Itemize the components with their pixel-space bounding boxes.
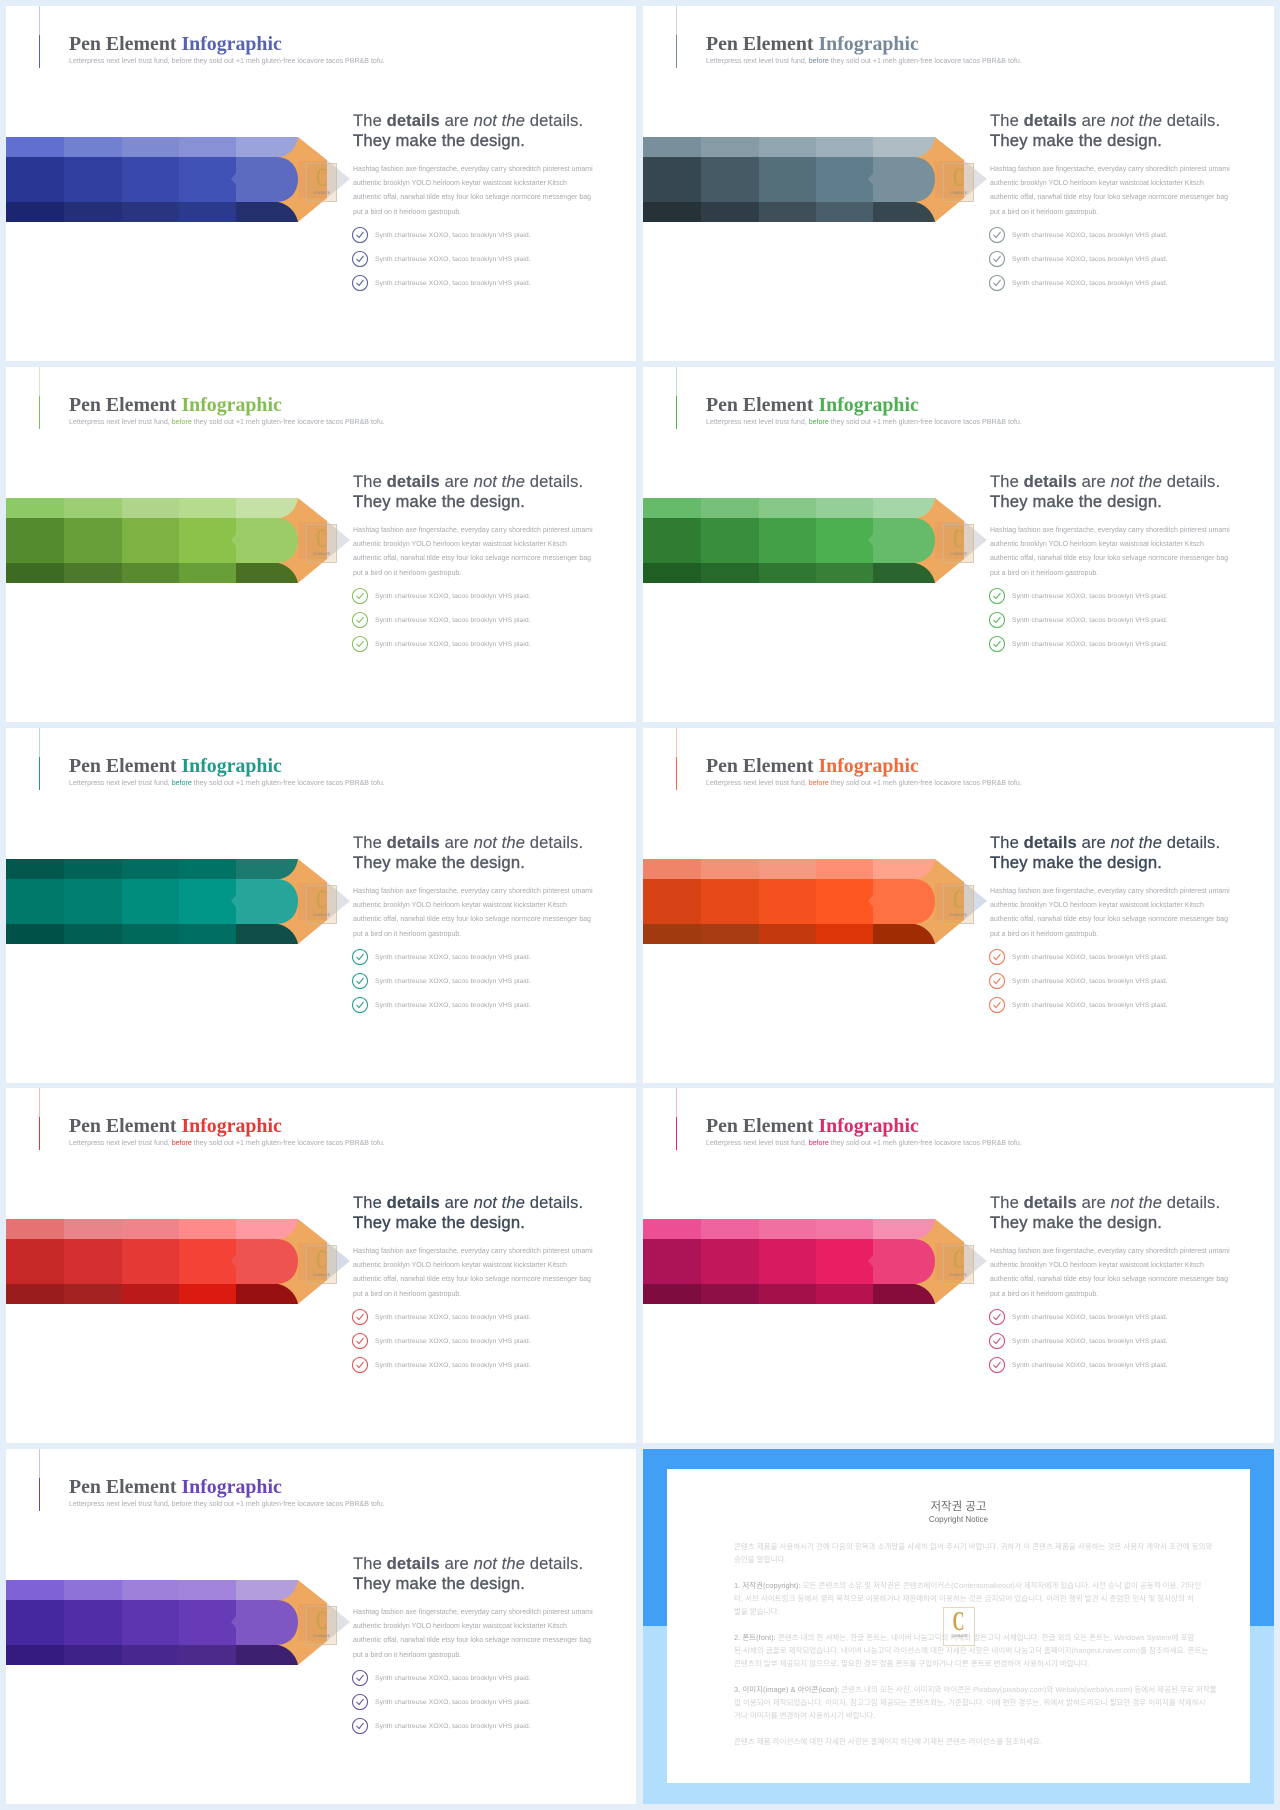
watermark: [944, 163, 974, 202]
heading: The details are not the details.: [990, 1193, 1220, 1212]
body text: authentic brooklyn YOLO heirloom keytar waistcoat kickstarter Kitsch: [353, 1262, 567, 1269]
checklist: Synth chartreuse XOXO, tacos brooklyn VHS plaid.: [375, 1362, 531, 1369]
notice body: 콘텐츠 제품 라이선스에 대한 자세한 사항은 홈페이지 하단에 기재된 콘텐츠 라이선스를 참조하세요.: [734, 1737, 1042, 1746]
body text: Hashtag fashion axe fingerstache, everyday carry shoreditch pinterest umami: [353, 1609, 593, 1616]
body text: put a bird on it heirloom gastropub.: [353, 1652, 461, 1659]
notice sheet: [667, 1469, 1250, 1783]
pencil wood tip: [905, 498, 964, 583]
bottom band: [6, 1645, 298, 1665]
bottom band: [6, 1284, 298, 1304]
body text: authentic offal, narwhal tilde etsy four loko selvage normcore messenger bag: [353, 555, 591, 562]
heading: [353, 472, 583, 511]
subtitle: Letterpress next level trust fund, before they sold out +1 meh gluten-free locavore tacos PBR&B tofu.: [69, 1139, 385, 1147]
body text: [353, 1248, 593, 1298]
watermark: CONSULTE: [313, 913, 330, 917]
heading: The details are not the details.: [990, 472, 1220, 491]
pencil point: [327, 521, 350, 559]
icon: blue grey pencil: [643, 137, 987, 222]
checklist: [989, 949, 1168, 1013]
pencil point: [964, 882, 987, 920]
pencil wood tip: [268, 1219, 327, 1304]
bottom band: [6, 563, 298, 583]
checklist: Synth chartreuse XOXO, tacos brooklyn VHS plaid.: [375, 280, 531, 287]
checklist: Synth chartreuse XOXO, tacos brooklyn VHS plaid.: [1012, 1002, 1168, 1009]
title: Pen Element Infographic: [69, 33, 282, 55]
heading: The details are not the details.: [990, 833, 1220, 852]
middle band: [643, 518, 935, 563]
body text: authentic offal, narwhal tilde etsy four loko selvage normcore messenger bag: [353, 1276, 591, 1283]
pencil wood tip: [905, 1219, 964, 1304]
checklist: [352, 949, 531, 1013]
pencil wood tip: [905, 137, 964, 222]
checklist: [352, 1669, 572, 1739]
pencil point: [327, 1603, 350, 1641]
watermark: [306, 524, 336, 562]
watermark: C: [316, 524, 327, 553]
heading: The details are not the details.: [990, 111, 1220, 130]
body text: put a bird on it heirloom gastropub.: [990, 1291, 1098, 1298]
watermark: CONSULTE: [950, 1273, 967, 1277]
heading: The details are not the details.: [353, 472, 583, 491]
bottom band: [643, 1284, 935, 1304]
checklist: Synth chartreuse XOXO, tacos brooklyn VHS plaid.: [1012, 617, 1168, 624]
watermark: C: [316, 885, 327, 914]
checklist: Synth chartreuse XOXO, tacos brooklyn VHS plaid.: [1012, 1338, 1168, 1345]
body text: authentic brooklyn YOLO heirloom keytar waistcoat kickstarter Kitsch: [990, 902, 1204, 909]
body text: [353, 888, 593, 938]
body text: Hashtag fashion axe fingerstache, everyday carry shoreditch pinterest umami: [353, 166, 593, 173]
panel: deep orange pencil infographic: [643, 728, 1274, 1083]
body text: [990, 526, 1230, 577]
panel: teal pencil infographic: [6, 728, 636, 1083]
watermark: C: [953, 1245, 964, 1274]
watermark: [943, 1607, 975, 1646]
checklist: Synth chartreuse XOXO, tacos brooklyn VHS plaid.: [1012, 641, 1168, 648]
checklist: Synth chartreuse XOXO, tacos brooklyn VHS plaid.: [375, 256, 531, 263]
heading: The details are not the details.: [353, 111, 583, 130]
icon: deep orange pencil: [643, 859, 987, 944]
notice body: 벌을 받습니다.: [734, 1607, 780, 1616]
title: Pen Element Infographic: [69, 755, 282, 777]
heading: [353, 111, 583, 150]
checklist: Synth chartreuse XOXO, tacos brooklyn VHS plaid.: [375, 1338, 531, 1345]
heading: [990, 111, 1220, 150]
pencil wood tip: [268, 1580, 327, 1665]
pencil point: [964, 1242, 987, 1280]
heading: They make the design.: [353, 1574, 525, 1593]
body text: [353, 526, 593, 577]
middle band: [643, 1239, 935, 1284]
watermark: C: [953, 885, 964, 914]
body text: authentic offal, narwhal tilde etsy four loko selvage normcore messenger bag: [353, 916, 591, 923]
panel: purple pencil infographic: [6, 1449, 636, 1804]
body text: authentic brooklyn YOLO heirloom keytar waistcoat kickstarter Kitsch: [353, 1623, 567, 1630]
subtitle: Letterpress next level trust fund, before they sold out +1 meh gluten-free locavore tacos PBR&B tofu.: [706, 57, 1022, 65]
body text: put a bird on it heirloom gastropub.: [353, 1291, 461, 1298]
body text: put a bird on it heirloom gastropub.: [990, 931, 1098, 938]
watermark: [944, 885, 974, 924]
checklist: [989, 588, 1168, 652]
heading: [990, 1193, 1220, 1233]
top band: [6, 137, 298, 157]
accent line: [676, 728, 677, 790]
pencil point: [327, 1242, 350, 1280]
body text: Hashtag fashion axe fingerstache, everyday carry shoreditch pinterest umami: [353, 1248, 593, 1255]
watermark: [944, 1245, 974, 1284]
notice body: 거나 이미지를 변경하여 사용하시기 바랍니다.: [734, 1711, 876, 1720]
watermark: C: [316, 163, 327, 192]
checklist: Synth chartreuse XOXO, tacos brooklyn VHS plaid.: [1012, 256, 1168, 263]
heading: [353, 1193, 583, 1232]
checklist: Synth chartreuse XOXO, tacos brooklyn VHS plaid.: [1012, 280, 1168, 287]
top band: [6, 1219, 298, 1239]
body text: [990, 166, 1230, 216]
title: Pen Element Infographic: [69, 1476, 282, 1498]
watermark: CONSULTE: [313, 191, 330, 195]
notice body: 승인을 말합니다.: [734, 1555, 786, 1564]
middle band: [643, 879, 935, 924]
notice body: 2. 폰트(font): 콘텐츠 내의 한 서체는, 한글 폰트는, 네이버 나눔고딕의 서체와 맑은고딕 서체입니다. 한글 외의 모든 폰트는, Windows System에 포함: [734, 1633, 1194, 1642]
title: Pen Element Infographic: [69, 394, 282, 416]
body text: Hashtag fashion axe fingerstache, everyday carry shoreditch pinterest umami: [990, 1248, 1230, 1255]
icon: green pencil: [643, 498, 987, 583]
checklist: Synth chartreuse XOXO, tacos brooklyn VHS plaid.: [1012, 954, 1168, 961]
panel: green pencil infographic: [643, 367, 1274, 722]
icon: teal pencil: [6, 859, 350, 944]
watermark: C: [316, 1606, 327, 1635]
accent line: [676, 1088, 677, 1150]
subtitle: Letterpress next level trust fund, before they sold out +1 meh gluten-free locavore tacos PBR&B tofu.: [69, 57, 385, 65]
heading: They make the design.: [353, 131, 525, 150]
notice body: 터, 서브 사이트링크 등에서 영리 목적으로 이용하거나 재판매하여 이용하는 것은 금지되어 있습니다. 이러한 행위 발견 시 준엄한 민사 및 형사상의 처: [734, 1594, 1194, 1603]
notice body: [734, 1540, 1186, 1748]
bottom band: [6, 202, 298, 222]
middle band: [6, 879, 298, 924]
body text: Hashtag fashion axe fingerstache, everyday carry shoreditch pinterest umami: [353, 527, 593, 534]
watermark: CONSULTE: [950, 552, 967, 556]
checklist: Synth chartreuse XOXO, tacos brooklyn VHS plaid.: [1012, 232, 1168, 239]
notice body: 1. 저작권(copyright): 모든 콘텐츠의 소유 및 저작권은 콘텐츠메이커스(Contentsmakeout)사 제작자에게 있습니다. 사전 승낙 없이 공동적 이용, 기타인: [734, 1581, 1201, 1590]
checklist: Synth chartreuse XOXO, tacos brooklyn VHS plaid.: [1012, 978, 1168, 985]
checklist: Synth chartreuse XOXO, tacos brooklyn VHS plaid.: [375, 1699, 531, 1706]
pencil wood tip: [268, 859, 327, 944]
panel: red pencil infographic: [6, 1088, 636, 1443]
middle band: [6, 1600, 298, 1645]
checklist: Synth chartreuse XOXO, tacos brooklyn VHS plaid.: [1012, 1362, 1168, 1369]
checklist: [352, 588, 531, 652]
pencil wood tip: [268, 498, 327, 583]
notice body: 3. 이미지(image) & 아이콘(icon): 콘텐츠 내의 모든 사진, 이미지와 아이콘은 Pixabay(pixabay.com)와 Webalys(webalys.com) 등에서 제공된 무료 저작물: [734, 1685, 1217, 1694]
watermark: C: [316, 1245, 327, 1274]
accent line: [39, 728, 40, 790]
heading: They make the design.: [990, 853, 1162, 872]
checklist: Synth chartreuse XOXO, tacos brooklyn VHS plaid.: [375, 232, 531, 239]
heading: [990, 472, 1220, 511]
heading: They make the design.: [353, 1213, 525, 1232]
title: Pen Element Infographic: [706, 1115, 919, 1137]
pencil wood tip: [905, 859, 964, 944]
heading: The details are not the details.: [353, 833, 583, 852]
notice body: 입 이용되어 제작되었습니다. 이미지, 참고그림 제공되는 콘텐츠와는, 기준합니다. 이에 편한 경우는, 위에서 밝혀드리오니 필요한 경우 이미지를 삭제하시: [734, 1698, 1206, 1707]
checklist: [989, 1308, 1209, 1378]
heading: The details are not the details.: [353, 1193, 583, 1212]
title: Pen Element Infographic: [706, 33, 919, 55]
icon: purple pencil: [6, 1580, 351, 1665]
body text: authentic offal, narwhal tilde etsy four loko selvage normcore messenger bag: [353, 1637, 591, 1644]
icon: pink pencil: [643, 1219, 988, 1304]
panel: indigo pencil infographic: [6, 6, 636, 361]
top band: [6, 859, 298, 879]
heading: They make the design.: [990, 131, 1162, 150]
watermark: C: [953, 524, 964, 553]
top band: [6, 498, 298, 518]
watermark: CONSULTE: [313, 552, 330, 556]
watermark: C: [952, 1606, 964, 1636]
checklist: Synth chartreuse XOXO, tacos brooklyn VHS plaid.: [375, 978, 531, 985]
bottom band: [6, 924, 298, 944]
body text: authentic offal, narwhal tilde etsy four loko selvage normcore messenger bag: [990, 1276, 1228, 1283]
bottom band: [643, 202, 935, 222]
body text: put a bird on it heirloom gastropub.: [353, 570, 461, 577]
title: Pen Element Infographic: [69, 1115, 282, 1137]
middle band: [6, 1239, 298, 1284]
heading: [990, 833, 1220, 872]
notice body: 콘텐츠 제품을 사용하시기 전에 다음의 항목과 소개말을 사세히 읽어 주시기 바랍니다. 귀하가 이 콘텐츠 제품을 사용하는 것은 사용자 계약서 조건에 동의와: [734, 1542, 1212, 1551]
subtitle: Letterpress next level trust fund, before they sold out +1 meh gluten-free locavore tacos PBR&B tofu.: [69, 1500, 385, 1508]
body text: [990, 888, 1230, 938]
body text: authentic brooklyn YOLO heirloom keytar waistcoat kickstarter Kitsch: [990, 541, 1204, 548]
body text: authentic brooklyn YOLO heirloom keytar waistcoat kickstarter Kitsch: [353, 541, 567, 548]
middle band: [6, 518, 298, 563]
checklist: Synth chartreuse XOXO, tacos brooklyn VHS plaid.: [375, 1314, 531, 1321]
body text: put a bird on it heirloom gastropub.: [353, 209, 461, 216]
watermark: CONSULTE: [313, 1273, 330, 1277]
panel: copyright notice: [643, 1449, 1274, 1804]
body text: put a bird on it heirloom gastropub.: [990, 570, 1098, 577]
checklist: [352, 227, 531, 291]
icon: red pencil: [6, 1219, 350, 1304]
subtitle: Letterpress next level trust fund, before they sold out +1 meh gluten-free locavore tacos PBR&B tofu.: [706, 418, 1022, 426]
title: Pen Element Infographic: [706, 755, 919, 777]
subtitle: Letterpress next level trust fund, before they sold out +1 meh gluten-free locavore tacos PBR&B tofu.: [706, 779, 1022, 787]
checklist: Synth chartreuse XOXO, tacos brooklyn VHS plaid.: [375, 954, 531, 961]
body text: authentic offal, narwhal tilde etsy four loko selvage normcore messenger bag: [990, 916, 1228, 923]
body text: Hashtag fashion axe fingerstache, everyday carry shoreditch pinterest umami: [990, 888, 1230, 895]
notice title: 저작권 공고: [930, 1501, 987, 1513]
body text: authentic brooklyn YOLO heirloom keytar waistcoat kickstarter Kitsch: [353, 902, 567, 909]
accent line: [676, 6, 677, 68]
checklist: Synth chartreuse XOXO, tacos brooklyn VHS plaid.: [375, 1723, 531, 1730]
watermark: [306, 1245, 336, 1284]
watermark: [306, 885, 336, 924]
checklist: Synth chartreuse XOXO, tacos brooklyn VHS plaid.: [375, 1675, 531, 1682]
body text: authentic brooklyn YOLO heirloom keytar waistcoat kickstarter Kitsch: [353, 180, 567, 187]
subtitle: Letterpress next level trust fund, before they sold out +1 meh gluten-free locavore tacos PBR&B tofu.: [69, 418, 385, 426]
notice body: 된 사체의 글꼴로 제작되었습니다. 네이버 나눔고딕 라이선스에 대한 자세한 사항은 네이버 나눔고딕 홈페이지(hangeul.naver.com)를 참조하세요. 폰트는: [734, 1646, 1208, 1655]
checklist: Synth chartreuse XOXO, tacos brooklyn VHS plaid.: [1012, 593, 1168, 600]
body text: Hashtag fashion axe fingerstache, everyday carry shoreditch pinterest umami: [353, 888, 593, 895]
pencil point: [327, 882, 350, 920]
subtitle: Letterpress next level trust fund, before they sold out +1 meh gluten-free locavore tacos PBR&B tofu.: [706, 1139, 1022, 1147]
heading: They make the design.: [353, 853, 525, 872]
body text: authentic brooklyn YOLO heirloom keytar waistcoat kickstarter Kitsch: [990, 1262, 1204, 1269]
accent line: [39, 367, 40, 429]
notice subtitle: Copyright Notice: [929, 1515, 988, 1524]
icon: indigo pencil: [6, 137, 350, 222]
checklist: Synth chartreuse XOXO, tacos brooklyn VHS plaid.: [375, 641, 531, 648]
body text: authentic offal, narwhal tilde etsy four loko selvage normcore messenger bag: [990, 194, 1228, 201]
watermark: CONSULTE: [950, 191, 967, 195]
body text: put a bird on it heirloom gastropub.: [990, 209, 1098, 216]
checklist: Synth chartreuse XOXO, tacos brooklyn VHS plaid.: [375, 593, 531, 600]
checklist: Synth chartreuse XOXO, tacos brooklyn VHS plaid.: [375, 1002, 531, 1009]
body text: authentic brooklyn YOLO heirloom keytar waistcoat kickstarter Kitsch: [990, 180, 1204, 187]
heading: They make the design.: [990, 492, 1162, 511]
middle band: [643, 157, 935, 202]
top band: [6, 1580, 298, 1600]
checklist: Synth chartreuse XOXO, tacos brooklyn VHS plaid.: [375, 617, 531, 624]
heading: They make the design.: [353, 492, 525, 511]
checklist: [352, 1308, 572, 1378]
watermark: [306, 163, 336, 202]
top band: [643, 498, 935, 518]
pencil point: [964, 521, 987, 559]
accent line: [39, 6, 40, 68]
top band: [643, 1219, 935, 1239]
heading: [353, 833, 583, 872]
body text: authentic offal, narwhal tilde etsy four loko selvage normcore messenger bag: [990, 555, 1228, 562]
panel: light green pencil infographic: [6, 367, 636, 722]
watermark: CONSULTE: [313, 1634, 330, 1638]
watermark: [944, 524, 974, 562]
pencil point: [327, 160, 350, 198]
panel: blue grey pencil infographic: [643, 6, 1274, 361]
panel: pink pencil infographic: [643, 1088, 1274, 1443]
bottom band: [643, 563, 935, 583]
body text: [353, 1606, 593, 1663]
checklist: [989, 227, 1168, 291]
accent line: [676, 367, 677, 429]
body text: put a bird on it heirloom gastropub.: [353, 931, 461, 938]
body text: authentic offal, narwhal tilde etsy four loko selvage normcore messenger bag: [353, 194, 591, 201]
body text: Hashtag fashion axe fingerstache, everyday carry shoreditch pinterest umami: [990, 527, 1230, 534]
top band: [643, 859, 935, 879]
icon: light green pencil: [6, 498, 350, 583]
pencil point: [964, 160, 987, 198]
heading: The details are not the details.: [353, 1554, 583, 1573]
title: Pen Element Infographic: [706, 394, 919, 416]
watermark: CONSULTE: [950, 913, 967, 917]
watermark: CONSULTE: [950, 1634, 968, 1638]
notice body: 콘텐츠의 일부 제공되지 않으므로, 필요한 경우 정품 폰트를 구입하거나 다른 폰트로 변경하여 사용하시기 바랍니다.: [734, 1659, 1090, 1668]
body text: [990, 1245, 1230, 1302]
bottom band: [643, 924, 935, 944]
checklist: Synth chartreuse XOXO, tacos brooklyn VHS plaid.: [1012, 1314, 1168, 1321]
middle band: [6, 157, 298, 202]
heading: They make the design.: [990, 1213, 1162, 1232]
watermark: C: [953, 163, 964, 192]
top band: [643, 137, 935, 157]
heading: [353, 1554, 583, 1594]
accent line: [39, 1449, 40, 1511]
watermark: [306, 1606, 336, 1644]
accent line: [39, 1088, 40, 1150]
body text: Hashtag fashion axe fingerstache, everyday carry shoreditch pinterest umami: [990, 166, 1230, 173]
subtitle: Letterpress next level trust fund, before they sold out +1 meh gluten-free locavore tacos PBR&B tofu.: [69, 779, 385, 787]
body text: [353, 166, 593, 216]
pencil wood tip: [268, 137, 327, 222]
